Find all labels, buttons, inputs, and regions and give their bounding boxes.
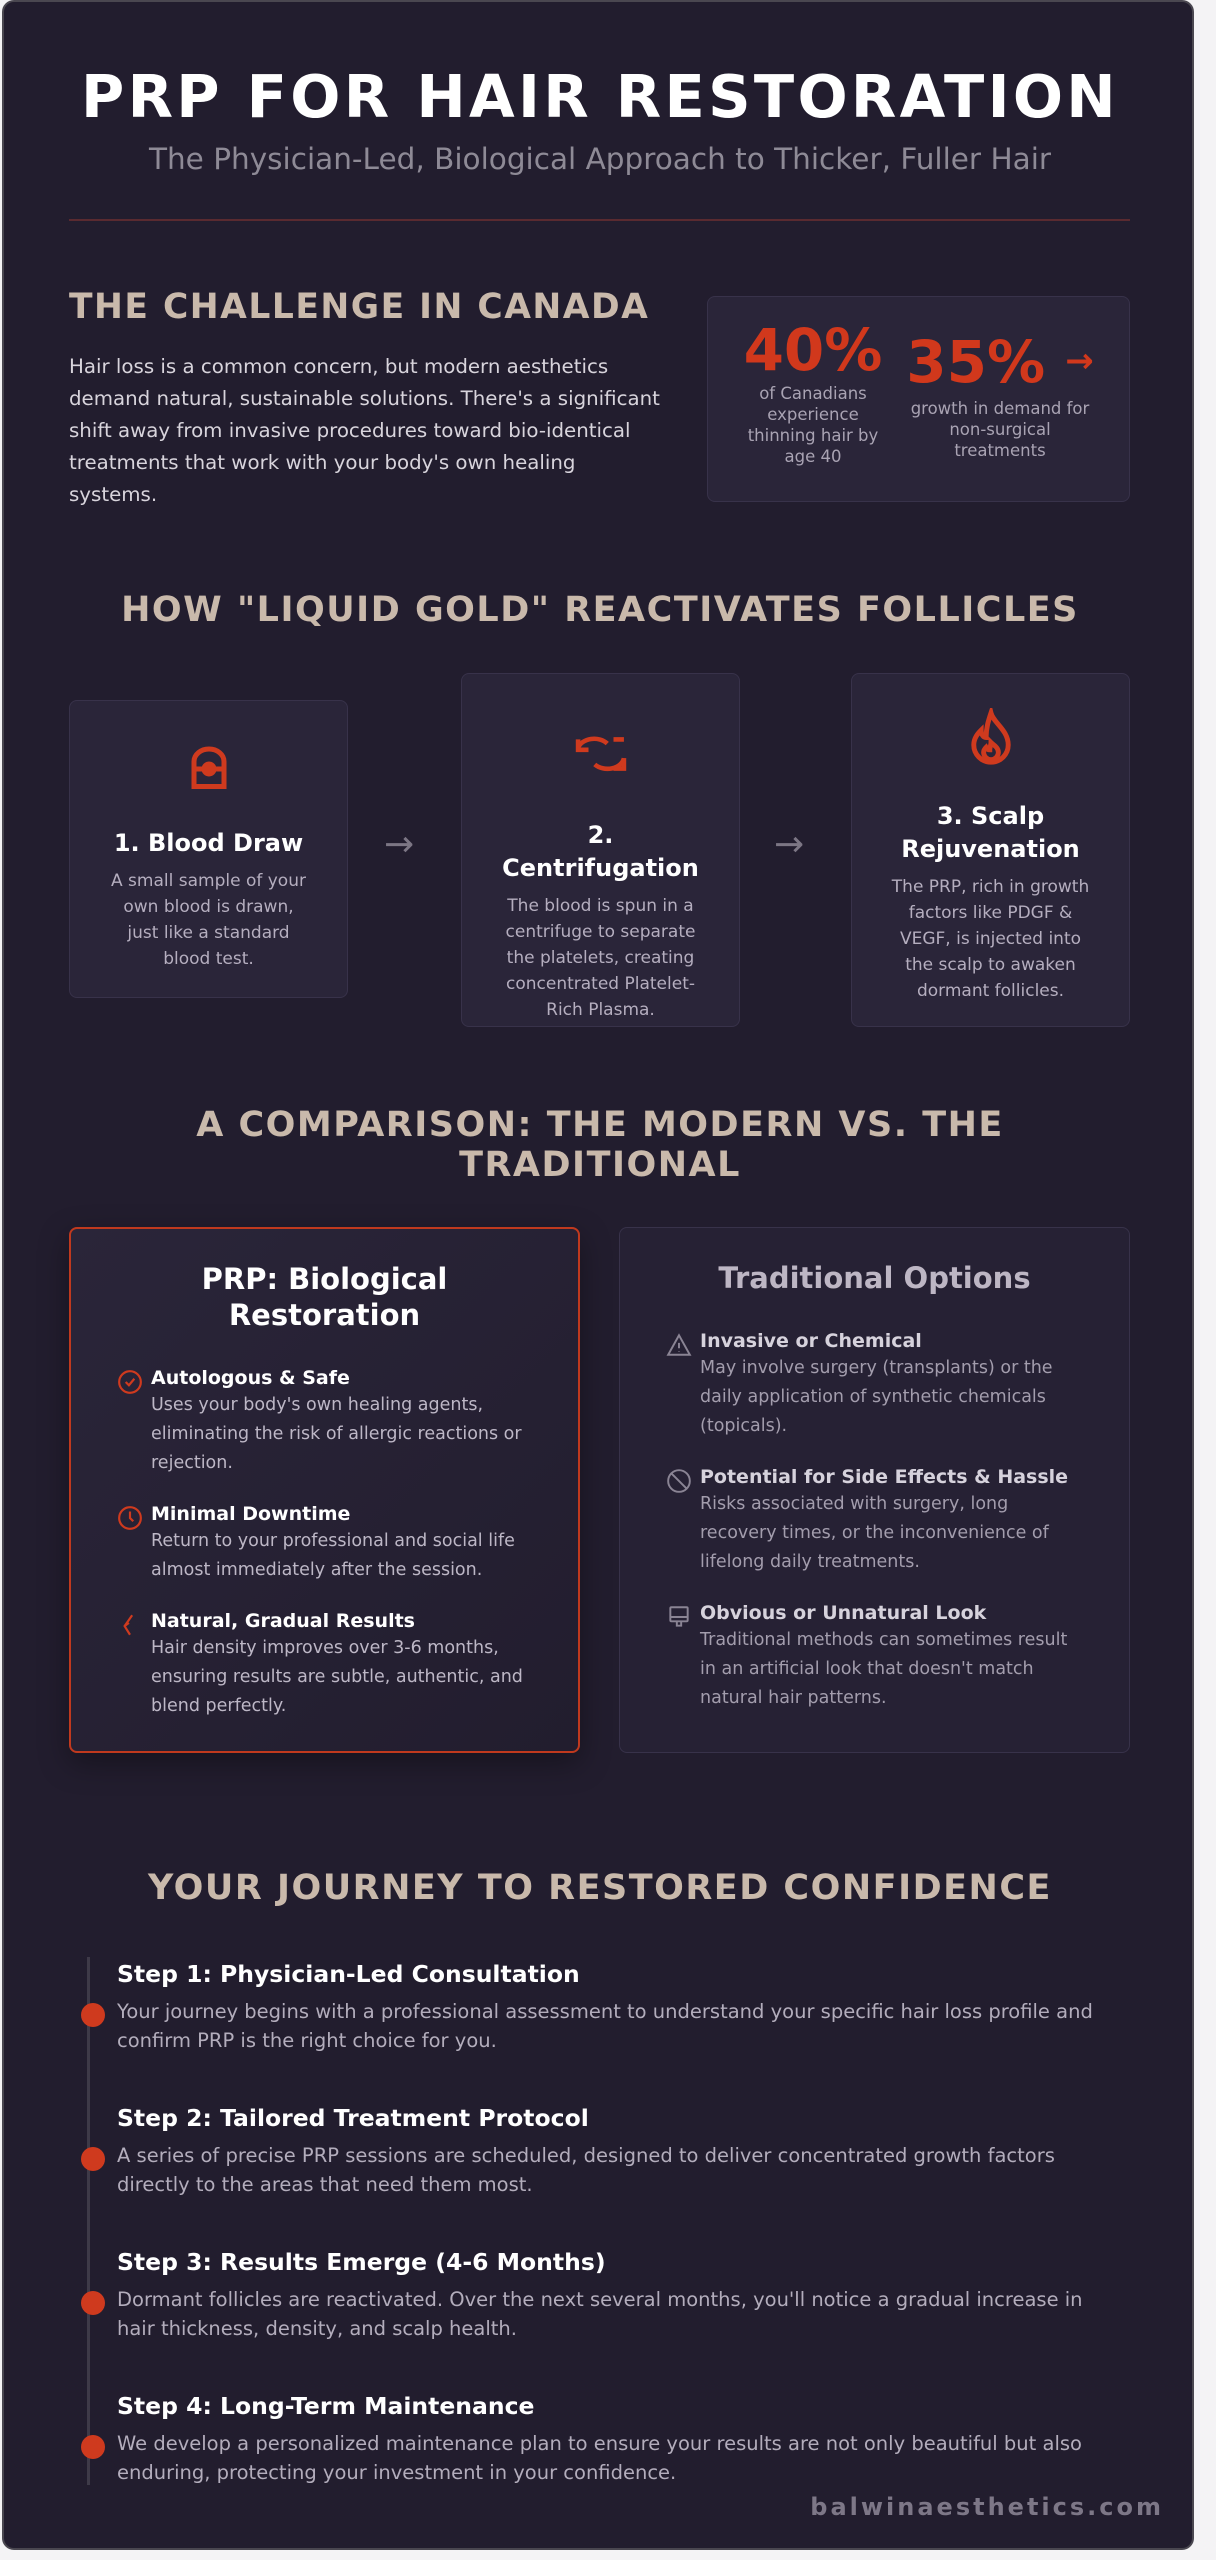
step 3: Dormant follicles are reactivated. Over the next several months, you'll notice a gradual increase in hair thickness, density, and scalp health. — [117, 2288, 1083, 2340]
item: unnatural look: Traditional methods can sometimes result in an artificial look that doesn't match natural hair patterns. — [700, 1630, 1067, 1708]
item: unnatural look — [669, 1602, 1067, 1708]
item: natural results: Hair density improves over 3-6 months, ensuring results are subtle, authentic, and blend perfectly. — [151, 1638, 523, 1716]
panel heading: Restoration — [229, 1298, 420, 1332]
step 4: We develop a personalized maintenance plan to ensure your results are not only beautiful but also enduring, protecting your investment in your confidence. — [117, 2432, 1082, 2484]
stat: 40%: 40% — [744, 316, 882, 384]
step 3 — [81, 2248, 1083, 2340]
item: minimal downtime: Minimal Downtime — [151, 1503, 350, 1525]
card: blood draw: A small sample of your own blood is drawn, just like a standard blood test. — [111, 871, 306, 969]
panel heading: Traditional Options — [718, 1261, 1031, 1295]
card: scalp rejuvenation: Rejuvenation — [901, 835, 1080, 863]
stat: 40% — [744, 316, 882, 466]
subtitle: The Physician-Led, Biological Approach to Thicker, Fuller Hair — [149, 142, 1051, 176]
title: PRP FOR HAIR RESTORATION — [81, 62, 1119, 131]
step 1: Step 1: Physician-Led Consultation — [117, 1960, 580, 1988]
card: centrifugation: Centrifugation — [502, 854, 699, 882]
card: blood draw: 1. Blood Draw — [114, 829, 303, 857]
card: centrifugation — [461, 673, 740, 1027]
stat: 35%: 35% → — [906, 328, 1094, 396]
step 1: Your journey begins with a professional assessment to understand your specific hair loss profile and confirm PRP is the right choice for you. — [117, 2000, 1093, 2052]
heading: the challenge in canada: THE CHALLENGE IN CANADA — [69, 287, 649, 327]
step 4: Step 4: Long-Term Maintenance — [117, 2392, 534, 2420]
panel: PRP biological restoration — [69, 1227, 580, 1753]
card: scalp rejuvenation — [851, 673, 1130, 1027]
item: invasive: May involve surgery (transplants) or the daily application of synthetic chemicals (topicals). — [700, 1358, 1053, 1436]
item: minimal downtime: Return to your professional and social life almost immediately after the session. — [151, 1531, 515, 1580]
card: blood draw — [69, 700, 348, 998]
stat: 35%: growth in demand for non-surgical treatments — [911, 399, 1089, 460]
panel: traditional options — [619, 1227, 1130, 1753]
panel heading: PRP: Biological — [202, 1262, 447, 1296]
footer website: balwinaesthetics.com — [810, 2493, 1164, 2521]
step 3: Step 3: Results Emerge (4-6 Months) — [117, 2248, 606, 2276]
item: autologous: Uses your body's own healing agents, eliminating the risk of allergic reactions or rejection. — [151, 1395, 522, 1473]
arrow: → — [774, 824, 804, 865]
stat: 40%: of Canadians experience thinning hair by age 40 — [748, 384, 878, 466]
arrow: → — [384, 824, 414, 865]
item: side effects: Risks associated with surgery, long recovery times, or the inconvenience of lifelong daily treatments. — [700, 1494, 1049, 1572]
item: autologous: Autologous & Safe — [151, 1367, 350, 1389]
card: centrifugation: 2. — [588, 821, 613, 849]
card: centrifugation: The blood is spun in a centrifuge to separate the platelets, creating concentrated Platelet-Rich Plasma. — [506, 896, 695, 1020]
item: autologous — [118, 1367, 522, 1473]
card: scalp rejuvenation: 3. Scalp — [937, 802, 1044, 830]
item: side effects: Potential for Side Effects & Hassle — [700, 1466, 1068, 1488]
icon: centrifuge — [576, 736, 626, 772]
item: natural results: Natural, Gradual Results — [151, 1610, 415, 1632]
timeline — [81, 1957, 1093, 2485]
item: invasive: Invasive or Chemical — [700, 1330, 922, 1352]
panel heading — [202, 1262, 447, 1332]
item: side effects — [667, 1466, 1068, 1572]
step 2: A series of precise PRP sessions are scheduled, designed to deliver concentrated growth factors directly to the areas that need them most. — [117, 2144, 1055, 2196]
stats box — [707, 296, 1130, 502]
icon: flame — [971, 708, 1011, 765]
heading: journey: YOUR JOURNEY TO RESTORED CONFIDENCE — [148, 1868, 1052, 1908]
card: scalp rejuvenation: The PRP, rich in growth factors like PDGF & VEGF, is injected into the scalp to awaken dormant follicles. — [892, 877, 1089, 1001]
heading: how liquid gold: HOW "LIQUID GOLD" REACTIVATES FOLLICLES — [121, 590, 1079, 630]
item: natural results — [123, 1610, 523, 1716]
item: invasive — [666, 1330, 1053, 1436]
step 1 — [81, 1960, 1093, 2052]
step 2: Step 2: Tailored Treatment Protocol — [117, 2104, 589, 2132]
icon: blood bag — [192, 746, 226, 789]
item: unnatural look: Obvious or Unnatural Look — [700, 1602, 986, 1624]
item: minimal downtime — [118, 1503, 515, 1580]
step 4 — [81, 2392, 1082, 2484]
challenge paragraph: Hair loss is a common concern, but modern aesthetics demand natural, sustainable solutions. There's a significant shift away from invasive procedures toward bio-identical treatments that work with your body's own healing systems. — [69, 355, 660, 506]
step 2 — [81, 2104, 1055, 2196]
stat: 35% — [906, 328, 1094, 460]
heading: comparison: A COMPARISON: THE MODERN VS. THE TRADITIONAL — [196, 1105, 1004, 1185]
